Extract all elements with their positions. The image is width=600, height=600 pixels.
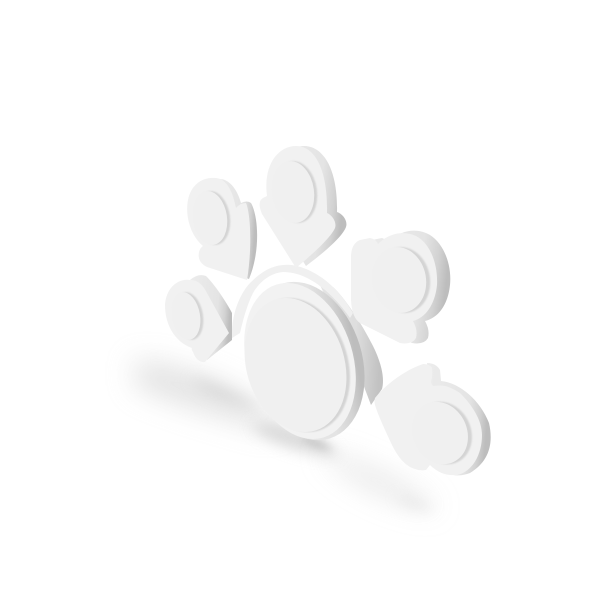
- inner circle: [371, 243, 435, 317]
- petal: right: [351, 231, 450, 343]
- petal: top middle: [260, 146, 346, 268]
- disc side wall: [229, 267, 383, 455]
- central disc: [226, 267, 383, 455]
- ground shadows: [135, 360, 440, 510]
- inner circle: [192, 189, 234, 247]
- petal: left: [165, 275, 232, 362]
- disc face: [229, 285, 362, 445]
- inner circle: [171, 290, 207, 342]
- disc step: [226, 269, 374, 453]
- arc band around central disc: [232, 265, 383, 405]
- inner circle: [271, 158, 321, 226]
- inner circle: [406, 393, 482, 473]
- petal: lower right: [374, 363, 491, 475]
- petal: top left: [187, 178, 257, 280]
